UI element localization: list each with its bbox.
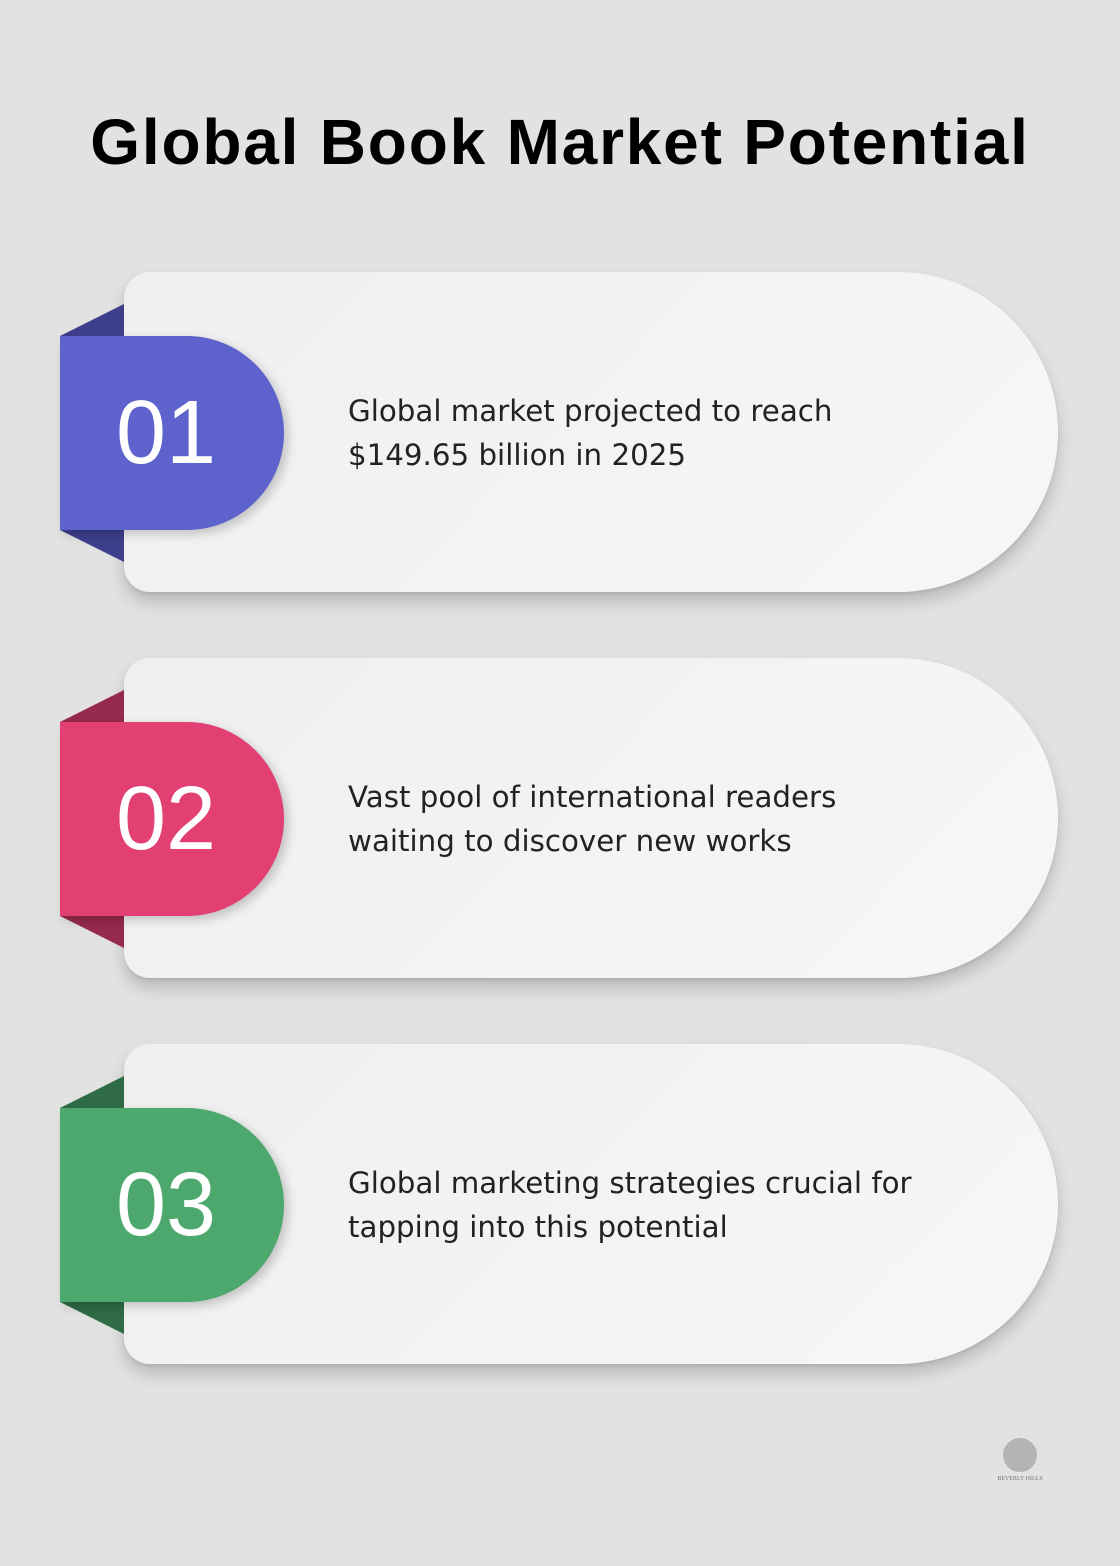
title: Global Book Market Potential [90, 106, 1030, 178]
card 01 [124, 272, 1058, 592]
number tab 03: 03 [116, 1155, 216, 1255]
text 01: $149.65 billion in 2025 [348, 438, 686, 472]
panel: item 02 [60, 658, 1064, 994]
text 01 [348, 394, 832, 472]
text 03: Global marketing strategies crucial for [348, 1166, 912, 1200]
card 03 [124, 1044, 1058, 1364]
text 01: Global market projected to reach [348, 394, 832, 428]
logo [997, 1438, 1043, 1482]
fold 03 [60, 1076, 124, 1334]
text 03 [348, 1166, 912, 1244]
panel: item 01 [60, 272, 1064, 608]
text 02: waiting to discover new works [348, 824, 792, 858]
fold 01 [60, 304, 124, 562]
text 03: tapping into this potential [348, 1210, 728, 1244]
number tab 01 [60, 336, 284, 530]
number tab 01: 01 [116, 383, 216, 483]
logo: BEVERLY HILLS [997, 1476, 1043, 1482]
number tab 02: 02 [116, 769, 216, 869]
fold 02 [60, 690, 124, 948]
text 02 [348, 780, 836, 858]
text 02: Vast pool of international readers [348, 780, 836, 814]
panel: item 03 [60, 1044, 1064, 1380]
number tab 03 [60, 1108, 284, 1302]
number tab 02 [60, 722, 284, 916]
card 02 [124, 658, 1058, 978]
